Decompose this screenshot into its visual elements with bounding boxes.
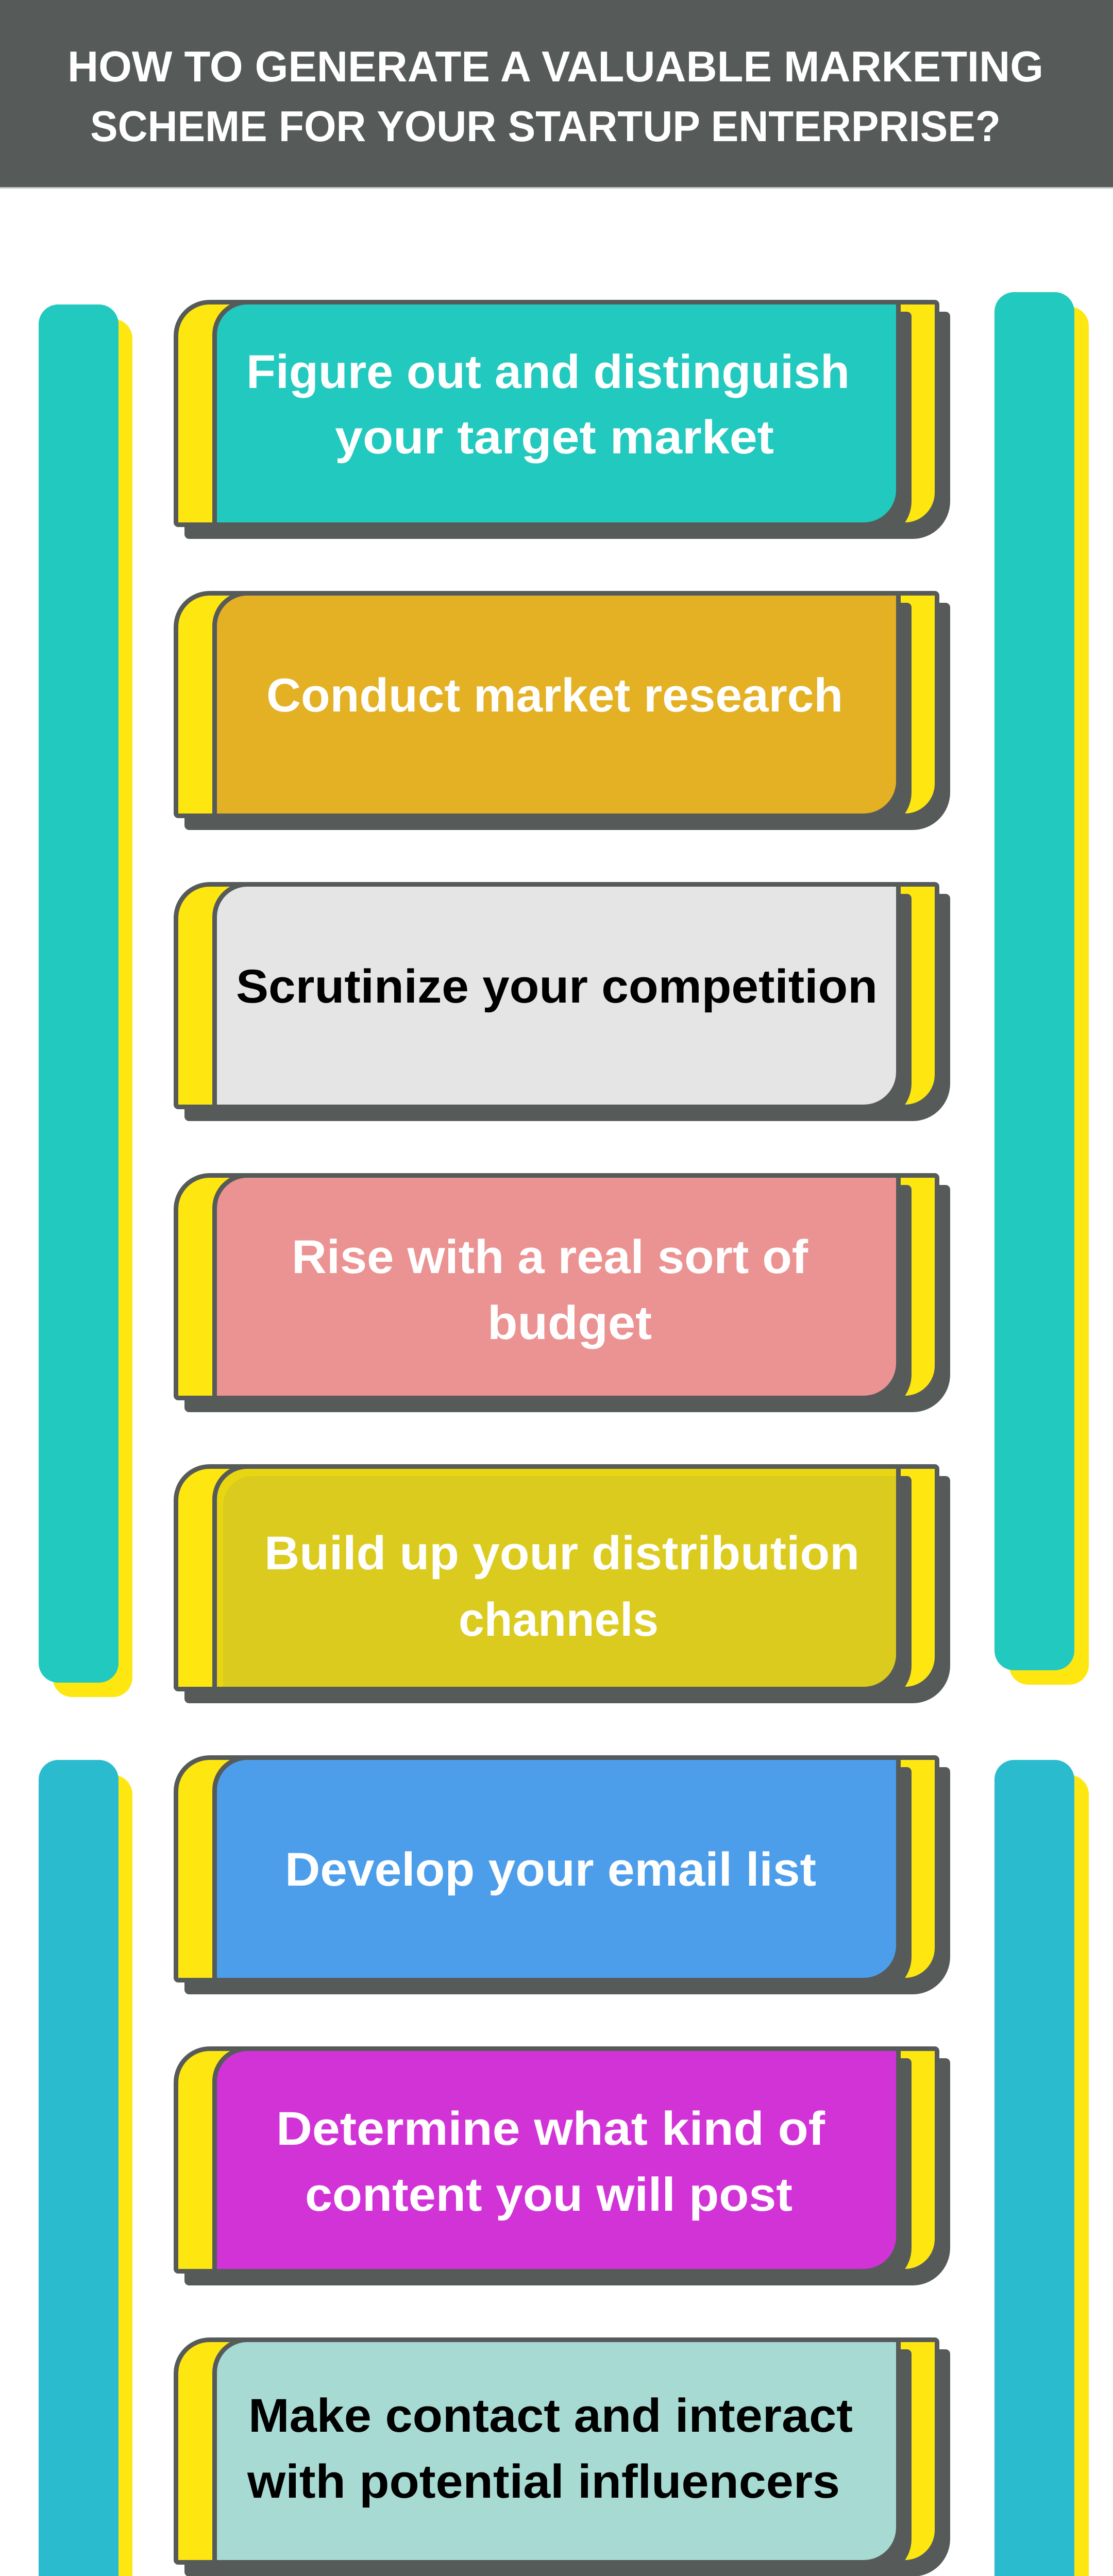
card 5: distribution channels (174, 1464, 950, 1703)
card 7: content: Determine what kind of (276, 2103, 825, 2155)
side bar: top right (994, 292, 1089, 1685)
card 6: email list: Develop your email list (285, 1843, 816, 1896)
title: HOW TO GENERATE A VALUABLE MARKETING (68, 42, 1043, 91)
card 6: email list (174, 1755, 950, 1994)
card 8: influencers: with potential influencers (247, 2455, 840, 2508)
card 1: target market (174, 300, 950, 539)
card 1: target market: your target market (335, 411, 774, 464)
side bar: bottom left (39, 1760, 132, 2576)
side bar: top left (39, 304, 132, 1697)
card 7: content (174, 2046, 950, 2285)
card 8: influencers (174, 2337, 950, 2576)
card 2: market research: Conduct market research (266, 669, 843, 722)
card 2: market research (174, 591, 950, 830)
card 4: budget: Rise with a real sort of (292, 1231, 808, 1283)
card 7: content: content you will post (305, 2168, 792, 2221)
title (68, 42, 1043, 150)
header band (0, 0, 1113, 189)
card 3: competition (174, 882, 950, 1121)
title: SCHEME FOR YOUR STARTUP ENTERPRISE? (90, 102, 1001, 150)
card 3: competition: Scrutinize your competition (236, 960, 878, 1013)
card 5: distribution channels: channels (459, 1594, 659, 1646)
card 8: influencers: Make contact and interact (248, 2389, 853, 2442)
card 4: budget: budget (487, 1297, 652, 1349)
card 5: distribution channels: Build up your distribution (264, 1527, 859, 1580)
card 4: budget (174, 1173, 950, 1412)
side bar: bottom right (994, 1760, 1089, 2576)
card 1: target market: Figure out and distinguish (246, 346, 850, 398)
